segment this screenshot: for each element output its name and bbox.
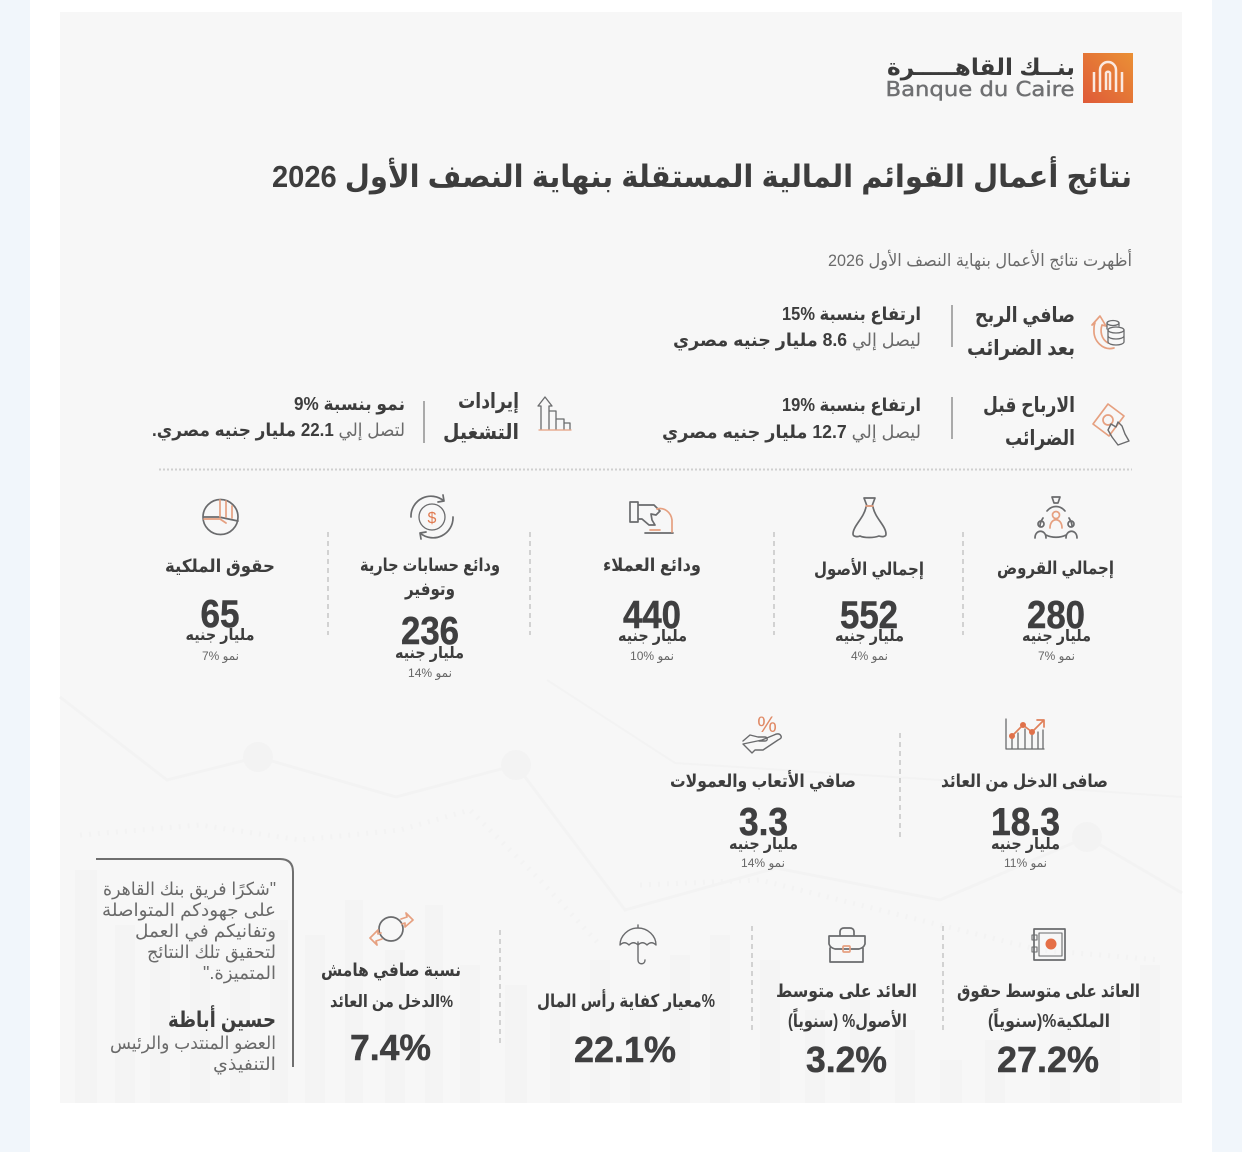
unit: مليار جنيه bbox=[395, 645, 464, 662]
icon: hand deposit bbox=[630, 502, 673, 533]
icon: safe bbox=[1032, 929, 1065, 960]
label line 2: بعد الضرائب bbox=[967, 337, 1075, 360]
kpi: capital adequacy ratio bbox=[537, 925, 715, 1070]
label: نسبة صافي هامش bbox=[321, 960, 461, 981]
label: صافى الدخل من العائد bbox=[941, 771, 1108, 792]
icon: rising bars bbox=[538, 397, 571, 430]
label: ودائع العملاء bbox=[603, 555, 701, 576]
kpi: return on average equity bbox=[957, 929, 1140, 1080]
kpi: total assets bbox=[814, 498, 924, 664]
kpi: net fees and commissions bbox=[670, 712, 856, 871]
logo mark bbox=[1083, 53, 1133, 103]
icon: money bag people bbox=[1035, 497, 1077, 538]
kpi: equity bbox=[165, 500, 275, 664]
change: ارتفاع بنسبة %15 bbox=[782, 304, 921, 324]
icon: money bag bbox=[853, 498, 886, 538]
growth: نمو %14 bbox=[408, 666, 452, 681]
author role: التنفيذي bbox=[213, 1054, 276, 1075]
label line 2: الأصول% (سنوياً) bbox=[788, 1008, 907, 1032]
label: العائد على متوسط حقوق bbox=[957, 981, 1140, 1002]
label line 2: %الدخل من العائد bbox=[330, 992, 453, 1012]
icon: pie chart bbox=[203, 500, 238, 534]
value: ليصل إلي 12.7 مليار جنيه مصري bbox=[662, 422, 921, 443]
label: العائد على متوسط bbox=[776, 981, 917, 1002]
highlight: profit before tax bbox=[662, 394, 1129, 450]
icon: line and bar chart bbox=[1006, 719, 1044, 749]
quote text bbox=[102, 879, 276, 984]
icon: briefcase bbox=[829, 928, 865, 962]
quote text: المتميزة." bbox=[203, 963, 276, 984]
growth: نمو %7 bbox=[1038, 649, 1075, 664]
growth: نمو %10 bbox=[630, 649, 674, 664]
icon: hand with percent: % bbox=[757, 712, 777, 737]
kpi: total loans bbox=[997, 497, 1114, 664]
value: 7.4% bbox=[350, 1027, 431, 1068]
author role: العضو المنتدب والرئيس bbox=[110, 1033, 276, 1054]
logo bbox=[886, 53, 1133, 103]
unit: مليار جنيه bbox=[1022, 628, 1091, 645]
quote text: على جهودكم المتواصلة bbox=[102, 900, 276, 921]
title: نتائج أعمال القوائم المالية المستقلة بنهاية النصف الأول 2026 bbox=[272, 156, 1132, 195]
quote text: وتفانيكم في العمل bbox=[135, 921, 276, 942]
label: إيرادات bbox=[458, 390, 519, 413]
value: 552 bbox=[840, 594, 898, 637]
label: صافي الربح bbox=[975, 304, 1075, 327]
icon: coin with exchange arrows bbox=[370, 913, 413, 945]
label line 2: الملكية%(سنوياً) bbox=[988, 1008, 1110, 1032]
icon: circular arrows with dollar bbox=[411, 495, 453, 539]
unit: مليار جنيه bbox=[186, 627, 254, 644]
change: ارتفاع بنسبة %19 bbox=[782, 395, 921, 415]
growth: نمو %14 bbox=[741, 856, 785, 871]
kpi: net interest income bbox=[941, 719, 1108, 871]
label line 2: التشغيل bbox=[443, 421, 519, 444]
logo arabic name: بنــك القاهـــــرة bbox=[887, 54, 1075, 81]
label: حقوق الملكية bbox=[165, 556, 275, 577]
change: نمو بنسبة %9 bbox=[294, 394, 405, 415]
kpi: customer deposits bbox=[603, 502, 701, 664]
label: إجمالي الأصول bbox=[814, 558, 924, 580]
quote author: حسين أباظة bbox=[168, 1004, 276, 1033]
growth: نمو %11 bbox=[1004, 856, 1047, 871]
value: 22.1% bbox=[574, 1029, 676, 1070]
value: 236 bbox=[401, 610, 459, 653]
author role bbox=[110, 1033, 276, 1075]
icon: coins with arrow bbox=[1092, 316, 1124, 349]
quote text: لتحقيق تلك النتائج bbox=[147, 942, 276, 963]
quote text: "شكرًا فريق بنك القاهرة bbox=[103, 879, 276, 900]
label line 2: الضرائب bbox=[1005, 427, 1075, 450]
icon: umbrella bbox=[620, 925, 656, 964]
unit: مليار جنيه bbox=[835, 628, 904, 645]
icon: circular arrows with dollar: $ bbox=[428, 510, 437, 527]
value: 280 bbox=[1027, 594, 1085, 637]
unit: مليار جنيه bbox=[991, 836, 1060, 853]
icon: hand with banknote bbox=[1093, 404, 1129, 445]
quote panel bbox=[96, 859, 293, 1075]
logo latin name: Banque du Caire bbox=[886, 77, 1074, 101]
unit: مليار جنيه bbox=[618, 628, 687, 645]
value: 65 bbox=[200, 593, 240, 636]
highlight: net profit after tax bbox=[673, 304, 1124, 360]
label: إجمالي القروض bbox=[997, 558, 1114, 579]
growth: نمو %7 bbox=[202, 649, 239, 664]
value: 18.3 bbox=[991, 801, 1060, 844]
value: 27.2% bbox=[997, 1039, 1099, 1080]
icon: hand with percent bbox=[743, 712, 781, 753]
kpi: current and savings deposits bbox=[360, 495, 500, 681]
label: الارباح قبل bbox=[983, 394, 1075, 417]
value: 3.3 bbox=[739, 801, 788, 844]
value: لتصل إلي 22.1 مليار جنيه مصري. bbox=[152, 420, 405, 441]
intro text: أظهرت نتائج الأعمال بنهاية النصف الأول 2026 bbox=[828, 249, 1132, 271]
label: ودائع حسابات جارية bbox=[360, 555, 500, 576]
value: 440 bbox=[623, 594, 681, 637]
kpi: return on average assets bbox=[776, 928, 917, 1080]
value: ليصل إلي 8.6 مليار جنيه مصري bbox=[673, 330, 921, 351]
background chart watermark bbox=[60, 680, 1182, 1103]
kpi: net interest margin bbox=[321, 913, 461, 1068]
label: %معيار كفاية رأس المال bbox=[537, 989, 715, 1011]
label line 2: وتوفير bbox=[404, 579, 455, 600]
value: 3.2% bbox=[806, 1039, 887, 1080]
label: صافي الأتعاب والعمولات bbox=[670, 770, 856, 792]
growth: نمو %4 bbox=[851, 649, 888, 664]
highlight: operating revenue bbox=[152, 390, 571, 444]
unit: مليار جنيه bbox=[729, 836, 798, 853]
